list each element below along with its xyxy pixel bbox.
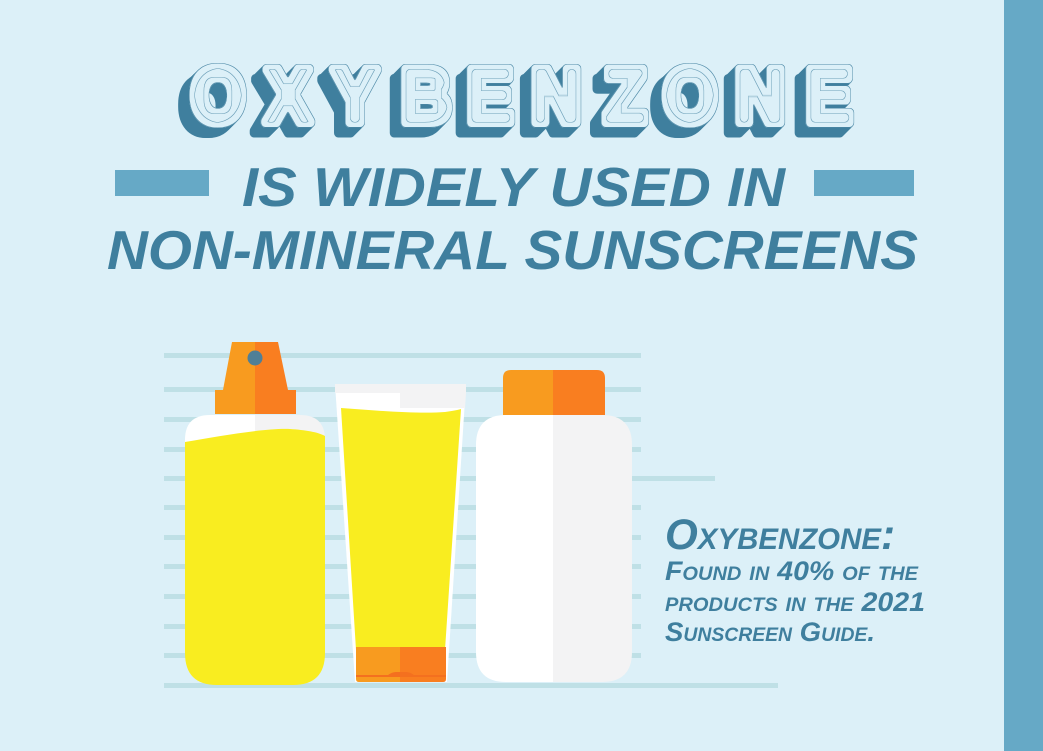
left heading bar bbox=[115, 170, 209, 196]
spray bottle label bbox=[185, 429, 325, 685]
heading line 2: NON-MINERAL SUNSCREENS bbox=[107, 219, 918, 281]
spray bottle body bbox=[185, 415, 255, 600]
callout heading: Oxybenzone: bbox=[665, 511, 895, 559]
callout body: products in the 2021 bbox=[665, 587, 925, 617]
callout: oxybenzone fact bbox=[665, 511, 925, 647]
right heading bar bbox=[814, 170, 914, 196]
callout body bbox=[665, 556, 925, 647]
white bottle cap bbox=[503, 370, 553, 415]
squeeze tube bbox=[335, 384, 466, 682]
callout body: Sunscreen Guide. bbox=[665, 617, 875, 647]
tube cap bbox=[356, 647, 400, 682]
spray nozzle hole bbox=[248, 350, 262, 366]
white bottle body bbox=[476, 415, 553, 682]
spray nozzle bbox=[215, 342, 255, 414]
white bottle bbox=[476, 370, 632, 682]
title: Oxybenzone: OXYBENZONE bbox=[191, 55, 852, 139]
tube label bbox=[341, 408, 461, 650]
tube body bbox=[335, 384, 466, 682]
heading line 1: IS WIDELY USED IN bbox=[242, 156, 786, 218]
spray bottle bbox=[185, 342, 325, 685]
right side band bbox=[1004, 0, 1043, 751]
callout body: Found in 40% of the bbox=[665, 556, 919, 586]
shelf lines backdrop bbox=[164, 353, 778, 688]
